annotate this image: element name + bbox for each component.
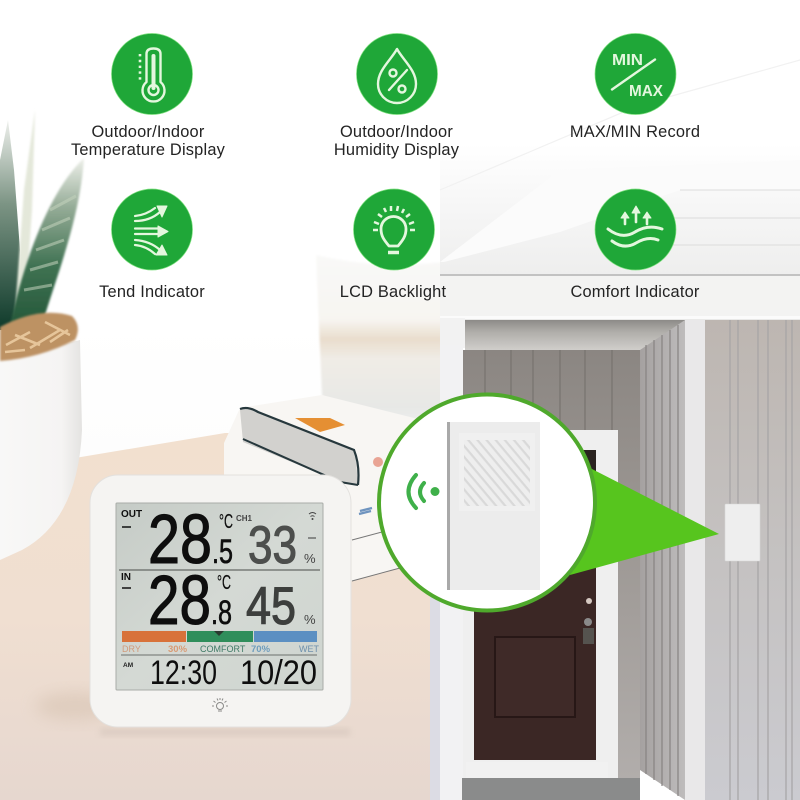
reading: outdoor: 33	[248, 516, 297, 575]
feature: comfort indicator	[570, 189, 700, 301]
icon: thermometer	[140, 48, 165, 101]
label: Outdoor/Indoor	[91, 123, 205, 141]
icon: trend arrows	[135, 206, 168, 255]
comfort scale bar	[122, 631, 319, 655]
background: house exterior	[440, 0, 800, 800]
vase	[316, 255, 442, 434]
front door with frame	[463, 430, 618, 778]
label: Tend Indicator	[99, 283, 205, 301]
callout pointer triangle	[570, 468, 719, 575]
reading: indoor: 45	[246, 577, 296, 636]
stacked books	[224, 395, 442, 581]
plant pot with soil	[0, 313, 82, 560]
icon: backlight button	[212, 698, 228, 711]
plant: snake plant leaves	[0, 110, 84, 330]
comfort scale bar: DRY	[122, 644, 141, 654]
comfort scale bar: 70%	[251, 644, 271, 655]
icon: wireless signal	[408, 475, 440, 508]
icon: comfort waves and arrows	[608, 206, 662, 246]
feature: tend indicator	[99, 189, 205, 301]
comfort scale bar: WET	[299, 644, 319, 654]
reading: indoor: %	[304, 612, 316, 627]
feature: temperature display	[91, 34, 205, 141]
feature: lcd backlight	[340, 189, 446, 301]
reading: outdoor: CH1	[236, 514, 253, 523]
divider	[119, 569, 320, 571]
icon: min max: MAX	[629, 83, 663, 100]
wall-mounted outdoor sensor	[725, 504, 760, 561]
comfort scale bar: COMFORT	[200, 644, 246, 654]
label: temperature display second line: Temperature Display	[71, 141, 226, 159]
lcd screen	[116, 503, 323, 690]
background: interior photo with table	[0, 0, 442, 800]
reading: indoor: 28	[148, 561, 211, 639]
reading: outdoor: 28	[148, 500, 212, 578]
thermometer hygrometer device	[90, 475, 351, 727]
clock and date: 10/20	[240, 654, 317, 692]
clock and date	[123, 654, 317, 692]
clock and date: 12:30	[150, 654, 217, 692]
icon: light bulb	[373, 206, 415, 252]
feature: max min record	[570, 34, 700, 141]
icon: percent water drop	[378, 49, 416, 103]
icon: min max	[612, 52, 663, 100]
reading: indoor: IN	[121, 572, 131, 583]
feature: humidity display	[340, 34, 453, 141]
label: humidity display second line: Humidity Display	[334, 141, 460, 159]
clock and date: AM	[123, 662, 133, 669]
reading: outdoor: OUT	[121, 509, 142, 520]
reading: indoor: .8	[211, 594, 232, 632]
label: Outdoor/Indoor	[340, 123, 453, 141]
reading: indoor	[121, 561, 316, 639]
icon: min max: MIN	[612, 52, 643, 69]
label: Comfort Indicator	[570, 283, 700, 301]
sensor body	[447, 422, 540, 590]
reading: outdoor: .5	[212, 533, 233, 571]
callout: magnified sensor circle	[379, 394, 595, 610]
reading: indoor: °C	[217, 572, 231, 594]
reading: outdoor: %	[304, 551, 316, 566]
label: LCD Backlight	[340, 283, 446, 301]
reading: outdoor: °C	[219, 511, 233, 533]
reading: outdoor	[121, 500, 316, 578]
comfort scale bar: 30%	[168, 644, 188, 655]
divider	[121, 654, 317, 656]
label: MAX/MIN Record	[570, 123, 700, 141]
